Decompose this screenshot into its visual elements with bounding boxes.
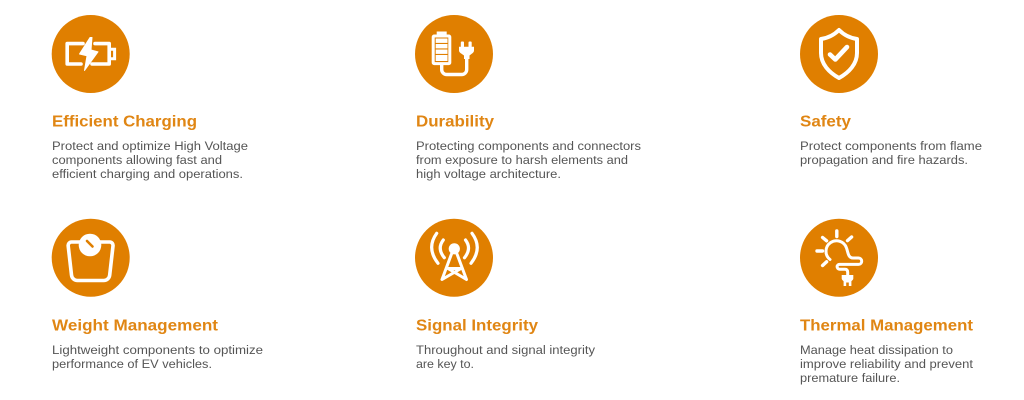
panel: safety [800,15,982,167]
panel: efficient charging [52,15,248,181]
description: improve reliability and prevent [800,357,974,371]
panel: weight management [52,219,263,371]
description [416,139,641,181]
icon: weighing scale [52,219,130,297]
icon: battery with plug [415,15,493,93]
icon: shield with check [800,15,878,93]
heading: Efficient Charging [52,114,197,130]
heading: Weight Management [52,318,219,334]
description: Manage heat dissipation to [800,343,953,357]
icon: light bulb with plug [800,219,878,297]
panel: signal integrity [415,219,596,371]
description: propagation and fire hazards. [800,153,968,167]
description [52,343,263,371]
icon: signal tower [415,219,493,297]
description: efficient charging and operations. [52,167,243,181]
description: performance of EV vehicles. [52,357,212,371]
description: from exposure to harsh elements and [416,153,628,167]
description [800,139,982,167]
description: premature failure. [800,371,900,385]
description: are key to. [416,357,474,371]
description: Lightweight components to optimize [52,343,263,357]
description: Protecting components and connectors [416,139,641,153]
description [416,343,596,371]
description [800,343,974,385]
heading: Safety [800,114,851,130]
heading: Durability [416,114,494,130]
heading: Signal Integrity [416,318,538,334]
description: high voltage architecture. [416,167,561,181]
description: Protect and optimize High Voltage [52,139,248,153]
panel: durability [415,15,641,181]
description: components allowing fast and [52,153,222,167]
heading: Thermal Management [800,318,974,334]
description [52,139,248,181]
description: Throughout and signal integrity [416,343,596,357]
panel: thermal management [800,219,974,385]
icon: battery with lightning bolt [52,15,130,93]
description: Protect components from flame [800,139,982,153]
